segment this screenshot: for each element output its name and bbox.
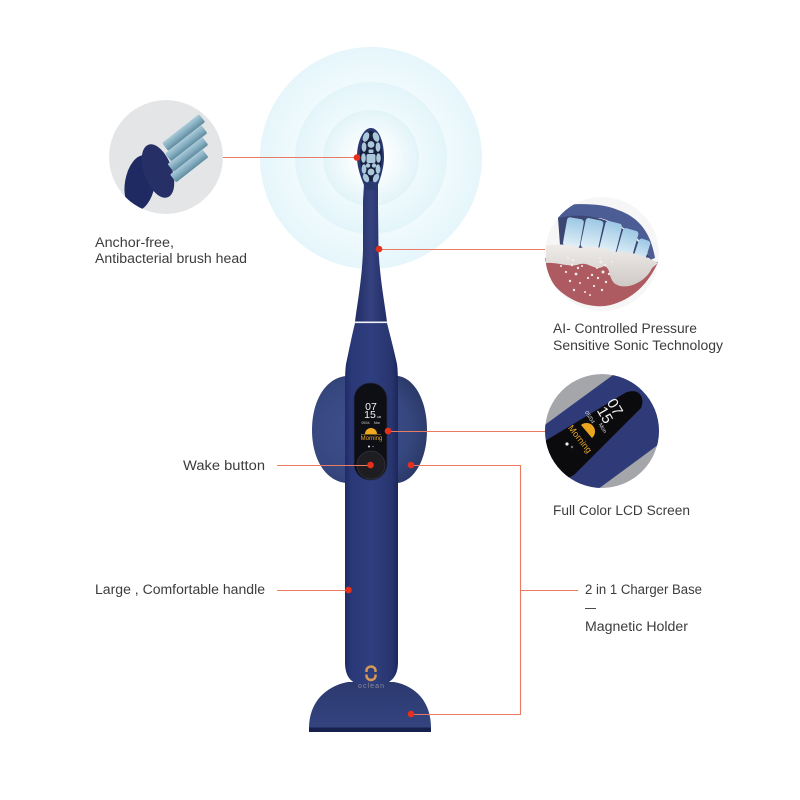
inset morning label: Morning bbox=[566, 423, 594, 455]
oclean logo bbox=[358, 666, 384, 690]
inset date: Mon bbox=[597, 422, 608, 435]
inset date: 05/04 bbox=[583, 410, 595, 425]
inset: brush head close-up bbox=[109, 100, 223, 214]
inset date bbox=[585, 410, 606, 434]
screen clock: 07 bbox=[365, 401, 377, 413]
bristle pattern bbox=[360, 131, 382, 183]
screen date bbox=[362, 421, 380, 425]
inset sun icon bbox=[581, 423, 595, 438]
brush head bbox=[357, 128, 384, 190]
inset: LCD screen close-up bbox=[545, 374, 659, 488]
sonic vibration rings bbox=[260, 47, 482, 269]
label: charger base: Magnetic Holder bbox=[585, 619, 689, 634]
dark bristle mount bbox=[558, 216, 650, 258]
screen date: 05/04 bbox=[362, 421, 370, 425]
magnetic holder bbox=[312, 376, 427, 483]
label: brush head bbox=[95, 235, 247, 266]
label: charger base: — bbox=[585, 600, 596, 615]
bristle tufts bbox=[162, 114, 208, 182]
brush head base bbox=[124, 144, 174, 209]
charger base bbox=[309, 682, 431, 732]
blue tufts bbox=[563, 217, 650, 258]
water spray bbox=[560, 257, 613, 296]
handle bbox=[345, 323, 398, 686]
label: sonic technology bbox=[553, 321, 723, 353]
label: wake button: Wake button bbox=[183, 458, 265, 473]
wake button bbox=[357, 451, 385, 479]
screen clock bbox=[364, 401, 382, 421]
brush arc bbox=[552, 204, 655, 260]
label: brush head: Antibacterial brush head bbox=[95, 251, 247, 266]
inset dots bbox=[565, 442, 573, 448]
screen morning label: Morning bbox=[361, 436, 382, 442]
screen clock: 15 bbox=[364, 409, 376, 421]
handle band bbox=[545, 375, 659, 488]
black screen bbox=[540, 391, 642, 478]
toothbrush bbox=[345, 128, 398, 690]
screen page dots bbox=[368, 446, 374, 448]
inset: sonic cleaning close-up bbox=[545, 197, 659, 311]
white collar ring bbox=[354, 322, 387, 323]
gums bbox=[545, 258, 658, 306]
label: handle: Large , Comfortable handle bbox=[95, 582, 265, 597]
callout connector lines bbox=[222, 158, 578, 714]
screen date: Mon bbox=[374, 421, 380, 425]
inset clock: 07 bbox=[603, 396, 626, 419]
label: charger base bbox=[585, 582, 702, 634]
teeth bbox=[546, 245, 658, 286]
screen sun icon bbox=[361, 428, 381, 434]
screen clock: AM bbox=[377, 415, 382, 419]
inset clock: 15 bbox=[593, 404, 616, 427]
brush neck bbox=[355, 180, 387, 322]
label: brush head: Anchor-free, bbox=[95, 235, 174, 250]
label: charger base: 2 in 1 Charger Base bbox=[585, 582, 702, 597]
inset clock bbox=[597, 398, 624, 423]
LCD screen panel bbox=[354, 383, 387, 480]
oclean logo: oclean bbox=[358, 683, 384, 690]
label: LCD screen: Full Color LCD Screen bbox=[553, 503, 690, 518]
label: sonic technology: AI- Controlled Pressure bbox=[553, 321, 697, 336]
callout dots bbox=[345, 154, 414, 717]
label: sonic technology: Sensitive Sonic Technology bbox=[553, 338, 723, 353]
